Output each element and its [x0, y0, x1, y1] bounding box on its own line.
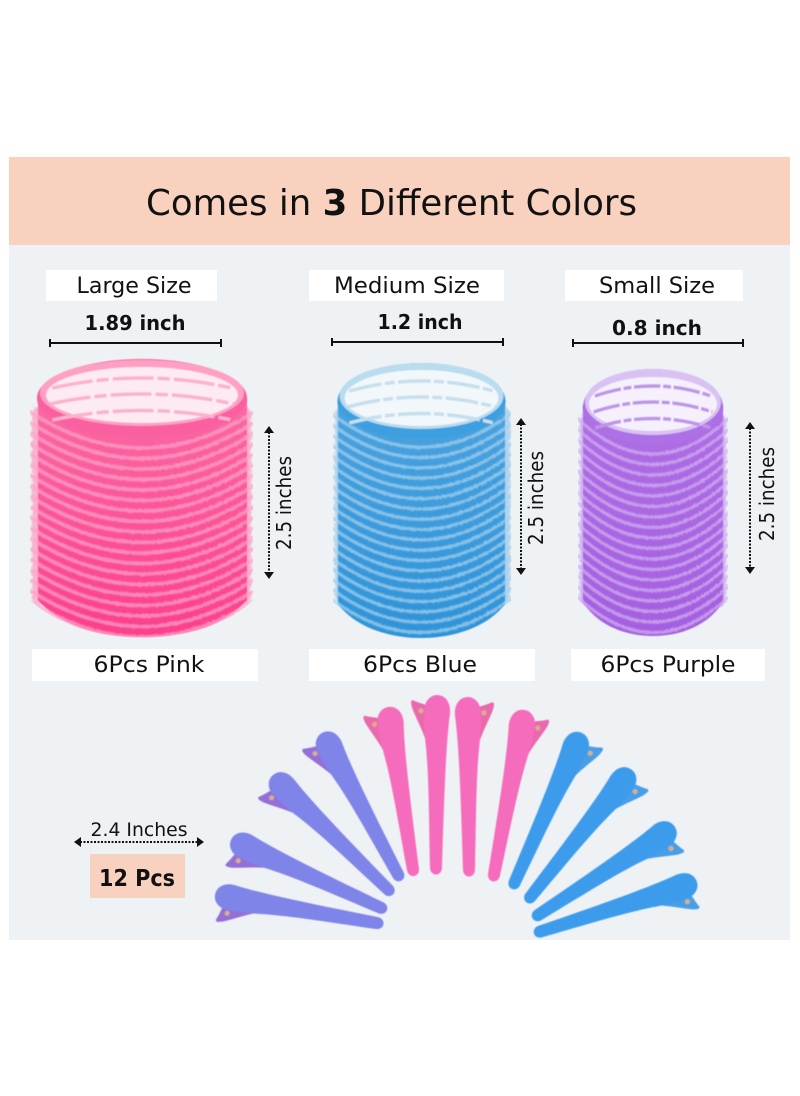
pink large roller — [30, 359, 254, 637]
purple hair clips — [211, 727, 414, 949]
quantity badge: 12 Pcs — [90, 854, 185, 898]
width dimension: 0.8 inch: 0.8 inch — [612, 316, 702, 340]
label: Large Size — [46, 270, 217, 301]
label: Small Size — [565, 270, 743, 301]
width dimension: 1.89 inch: 1.89 inch — [84, 311, 186, 335]
purple small roller — [577, 369, 729, 643]
quantity badge: 12 Pcs: 12 Pcs — [99, 866, 175, 892]
header band — [9, 157, 790, 245]
background panel — [9, 157, 790, 940]
clip length dimension: 2.4 Inches: 2.4 Inches — [90, 819, 188, 841]
blue medium roller — [329, 363, 513, 638]
blue hair clips — [499, 728, 705, 957]
label: Medium Size — [309, 270, 504, 301]
height dimension: purple roller: 2.5 inches — [755, 447, 779, 541]
label: 6Pcs Pink: 6Pcs Pink — [94, 653, 205, 678]
clip length dimension: 2.4 Inches — [74, 819, 204, 847]
pink hair clips — [362, 695, 551, 886]
height dimension: pink roller — [264, 426, 296, 579]
width dimension: 1.2 inch — [331, 310, 504, 346]
label: Medium Size: Medium Size — [334, 274, 480, 299]
width dimension: 0.8 inch — [572, 316, 744, 347]
label: Small Size: Small Size — [599, 274, 715, 299]
width dimension: 1.89 inch — [49, 311, 222, 347]
width dimension: 1.2 inch: 1.2 inch — [378, 310, 462, 334]
height dimension: blue roller: 2.5 inches — [524, 451, 548, 545]
label: 6Pcs Purple: 6Pcs Purple — [600, 653, 736, 678]
height dimension: purple roller — [745, 422, 779, 574]
label: 6Pcs Blue: 6Pcs Blue — [363, 653, 477, 678]
title: Comes in 3 Different Colors — [146, 183, 637, 224]
label: Large Size: Large Size — [76, 274, 192, 299]
label: 6Pcs Blue — [309, 649, 535, 681]
height dimension: blue roller — [516, 418, 548, 575]
label: 6Pcs Purple — [571, 649, 765, 681]
height dimension: pink roller: 2.5 inches — [272, 456, 296, 550]
label: 6Pcs Pink — [32, 649, 258, 681]
